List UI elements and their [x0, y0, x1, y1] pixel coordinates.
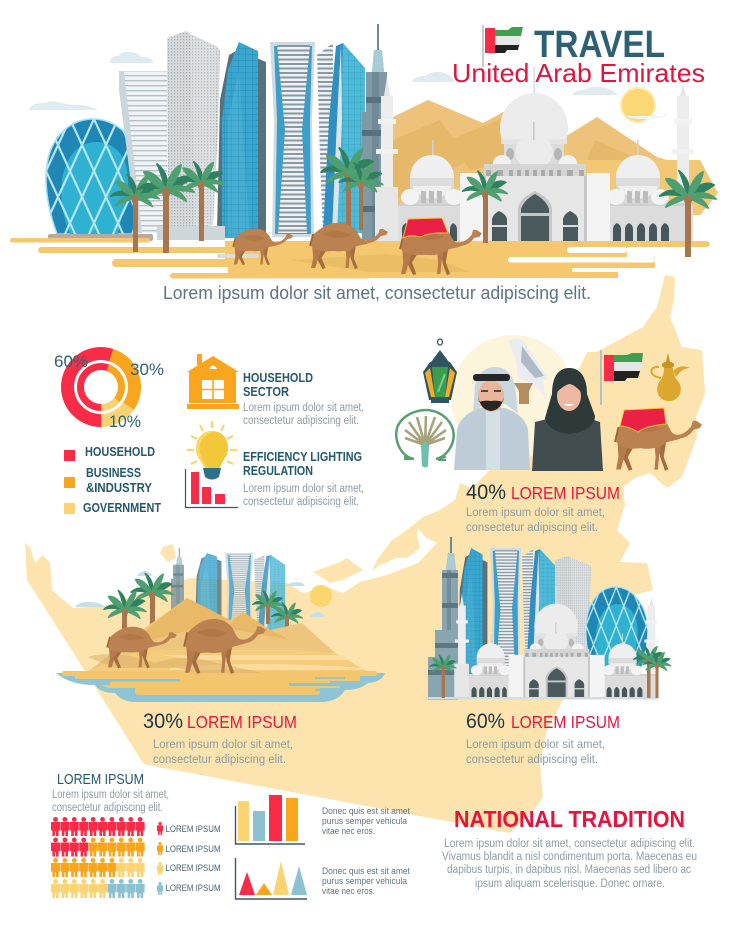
Burj tower	[362, 24, 387, 240]
text: bar chart note: purus semper vehicula	[322, 816, 407, 826]
text: 60% lorem ipsum: LOREM IPSUM	[511, 712, 620, 732]
heading: lorem ipsum statistics: LOREM IPSUM	[57, 772, 144, 788]
pictogram legend: LOREM IPSUM	[166, 883, 221, 894]
text: triangle chart note: vitae nec eros.	[322, 886, 375, 896]
pictogram people grid	[51, 817, 145, 898]
desert scene with camels	[56, 548, 385, 702]
pictogram legend: LOREM IPSUM	[166, 863, 221, 874]
text: 60% lorem ipsum: Lorem ipsum dolor sit amet,	[466, 739, 605, 751]
twin tower	[522, 549, 555, 674]
text: efficiency lighting regulation: EFFICIENCY LIGHTING	[243, 450, 362, 464]
grey tower	[555, 556, 591, 668]
front palm	[104, 590, 146, 629]
towers small	[195, 553, 285, 635]
sun with plane	[621, 88, 667, 122]
text: 30% lorem ipsum: consectetur adipiscing elit.	[153, 754, 286, 766]
text: triangle chart note: Donec quis est sit amet	[322, 866, 410, 876]
blue tower	[458, 548, 487, 689]
dome base platform	[48, 234, 153, 241]
Grand Mosque	[375, 67, 694, 242]
heading: national tradition: NATIONAL TRADITION	[454, 806, 685, 832]
text: 30% lorem ipsum: 30%	[143, 710, 183, 733]
figure: woman in abaya	[532, 368, 603, 471]
triangle chart	[236, 858, 307, 899]
sun	[310, 585, 332, 607]
burj	[428, 537, 458, 700]
heading: United Arab Emirates: United Arab Emirates	[452, 58, 705, 88]
sand dunes behind mosque	[393, 100, 718, 215]
bar chart	[236, 795, 305, 844]
striped tower	[490, 548, 521, 683]
donut chart	[54, 352, 164, 431]
camels	[107, 619, 266, 674]
camels walking	[233, 218, 482, 275]
twin blue tower	[317, 43, 365, 233]
grey grid tower	[167, 31, 220, 235]
text: household sector: SECTOR	[243, 385, 289, 399]
text: 40% lorem ipsum: 40%	[466, 481, 506, 504]
donut legend: HOUSEHOLD	[85, 445, 155, 459]
pictogram legend	[157, 822, 221, 895]
tower plinth	[157, 226, 225, 240]
mosque	[454, 587, 658, 699]
heading: lorem ipsum statistics	[52, 772, 169, 814]
text: efficiency lighting regulation: REGULATION	[243, 464, 313, 478]
donut legend: GOVERNMENT	[83, 501, 161, 515]
palms	[430, 646, 671, 698]
map of United Arab Emirates	[25, 275, 705, 833]
palm trees	[111, 148, 716, 257]
sand ground	[10, 238, 710, 278]
heading: lorem ipsum statistics: consectetur adipiscing elit.	[52, 802, 163, 814]
striped frame tower	[270, 42, 315, 237]
icon: Arabic coffee pot	[651, 353, 690, 401]
clouds	[29, 52, 618, 110]
text: household sector	[243, 371, 364, 427]
red saddle	[403, 218, 448, 238]
pictogram legend: LOREM IPSUM	[166, 844, 221, 855]
camel with saddle	[615, 408, 702, 471]
burj small	[171, 548, 184, 624]
label: 10%: 10%	[109, 412, 141, 431]
text: efficiency lighting regulation: Lorem ipsum dolor sit amet,	[243, 483, 364, 495]
hero skyline and mosque scene	[10, 24, 718, 278]
text: efficiency lighting regulation: consectetur adipiscing elit.	[243, 496, 359, 508]
city and mosque scene	[426, 537, 671, 700]
icon: house	[187, 354, 239, 409]
text: national tradition body: Vivamus blandit a nisl condimentum porta. Maecenas eu	[442, 851, 697, 863]
text: 30% lorem ipsum: Lorem ipsum dolor sit amet,	[153, 739, 293, 751]
people and culture scene	[396, 335, 702, 471]
text: 40% lorem ipsum	[466, 481, 620, 534]
dome tower	[586, 587, 648, 672]
flag on pole	[600, 350, 643, 405]
blue glass tower	[217, 42, 266, 238]
Aldar headquarters dome	[46, 119, 144, 234]
text: bar chart note	[322, 806, 410, 836]
camel shadows	[88, 654, 262, 673]
donut legend: &INDUSTRY	[86, 481, 153, 495]
text: national tradition body: Lorem ipsum dolor sit amet, consectetur adipiscing elit.	[444, 838, 695, 850]
icon: palm island	[396, 410, 454, 468]
text: efficiency lighting regulation	[243, 450, 364, 508]
text: 40% lorem ipsum: Lorem ipsum dolor sit amet,	[466, 507, 605, 519]
white striped tower	[119, 71, 167, 233]
sand shore	[62, 671, 377, 695]
label: 60%: 60%	[54, 352, 88, 371]
text: triangle chart note	[322, 866, 410, 896]
text: 40% lorem ipsum: LOREM IPSUM	[511, 483, 620, 503]
text: 30% lorem ipsum: LOREM IPSUM	[187, 712, 297, 732]
heading: TRAVEL: TRAVEL	[534, 24, 665, 66]
water	[56, 673, 385, 702]
figure: falcon on perch	[508, 338, 548, 404]
ground line	[426, 697, 658, 700]
icon: light bulb	[187, 421, 237, 480]
pictogram legend: LOREM IPSUM	[166, 824, 221, 835]
subtitle: Lorem ipsum dolor sit amet, consectetur adipiscing elit.	[163, 283, 591, 303]
palms back	[131, 574, 302, 632]
text: 40% lorem ipsum: consectetur adipiscing elit.	[466, 522, 598, 534]
text: 60% lorem ipsum: consectetur adipiscing elit.	[466, 754, 598, 766]
text: household sector: HOUSEHOLD	[243, 371, 313, 385]
heading: lorem ipsum statistics: Lorem ipsum dolor sit amet,	[52, 789, 169, 801]
icon: lantern	[423, 339, 457, 403]
label: 30%: 30%	[130, 360, 164, 379]
icon: small bar chart	[186, 469, 238, 508]
text: bar chart note: vitae nec eros.	[322, 826, 375, 836]
pale circle behind figures	[451, 335, 575, 459]
figure: man in kandura	[454, 367, 530, 470]
title block	[452, 24, 705, 88]
dunes	[85, 598, 368, 672]
text: household sector: Lorem ipsum dolor sit amet,	[243, 402, 364, 414]
text: 60% lorem ipsum	[466, 710, 620, 766]
text: national tradition body: dapibus turpis, in dapibus nisl. Maecenas sed libero ac	[447, 864, 691, 876]
text: national tradition body	[442, 838, 697, 890]
text: 30% lorem ipsum	[143, 710, 297, 766]
text: national tradition body: ipsum aliquam scelerisque. Donec ornare.	[475, 878, 665, 890]
flag: UAE	[482, 25, 523, 67]
text: triangle chart note: purus semper vehicula	[322, 876, 407, 886]
clouds	[75, 571, 325, 617]
donut legend: BUSINESS	[86, 466, 141, 480]
text: 60% lorem ipsum: 60%	[466, 710, 505, 733]
text: household sector: consectetur adipiscing elit.	[243, 415, 359, 427]
text: bar chart note: Donec quis est sit amet	[322, 806, 410, 816]
donut legend	[64, 445, 161, 515]
